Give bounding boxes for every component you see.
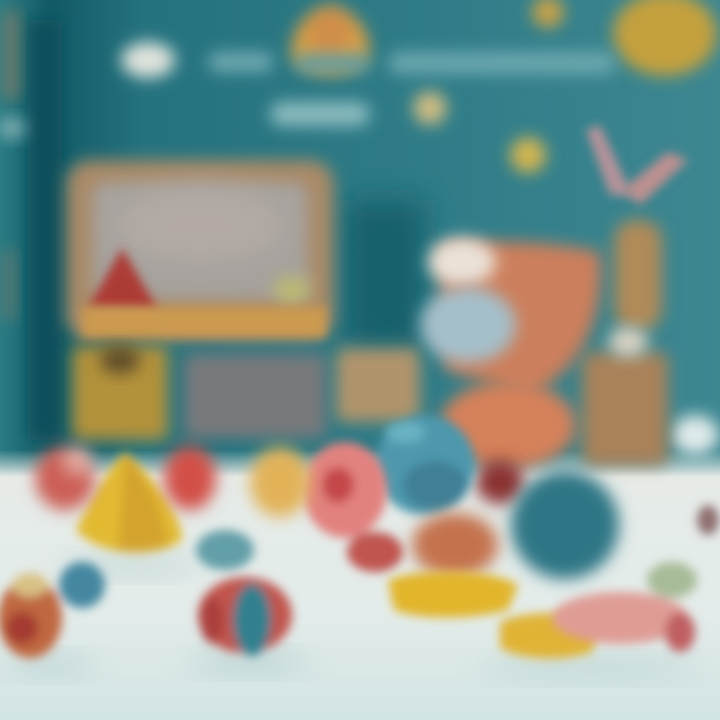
hanging decorations — [291, 0, 717, 173]
plush bunny — [420, 125, 688, 504]
orange dome — [412, 513, 498, 577]
yellow cone toy — [76, 452, 182, 552]
pink and green block — [552, 505, 719, 652]
blurred banner lettering — [121, 42, 616, 126]
red toys behind cone — [35, 446, 216, 510]
teal ball — [511, 471, 619, 579]
small stacked ball toy — [196, 530, 292, 656]
left corner toys — [0, 562, 105, 658]
blue ball — [375, 415, 475, 515]
pink ring toy — [303, 442, 403, 572]
toy shelf crate — [66, 160, 420, 440]
yellow-orange toy — [250, 447, 310, 517]
yellow bars — [388, 572, 600, 658]
floor — [0, 415, 720, 720]
